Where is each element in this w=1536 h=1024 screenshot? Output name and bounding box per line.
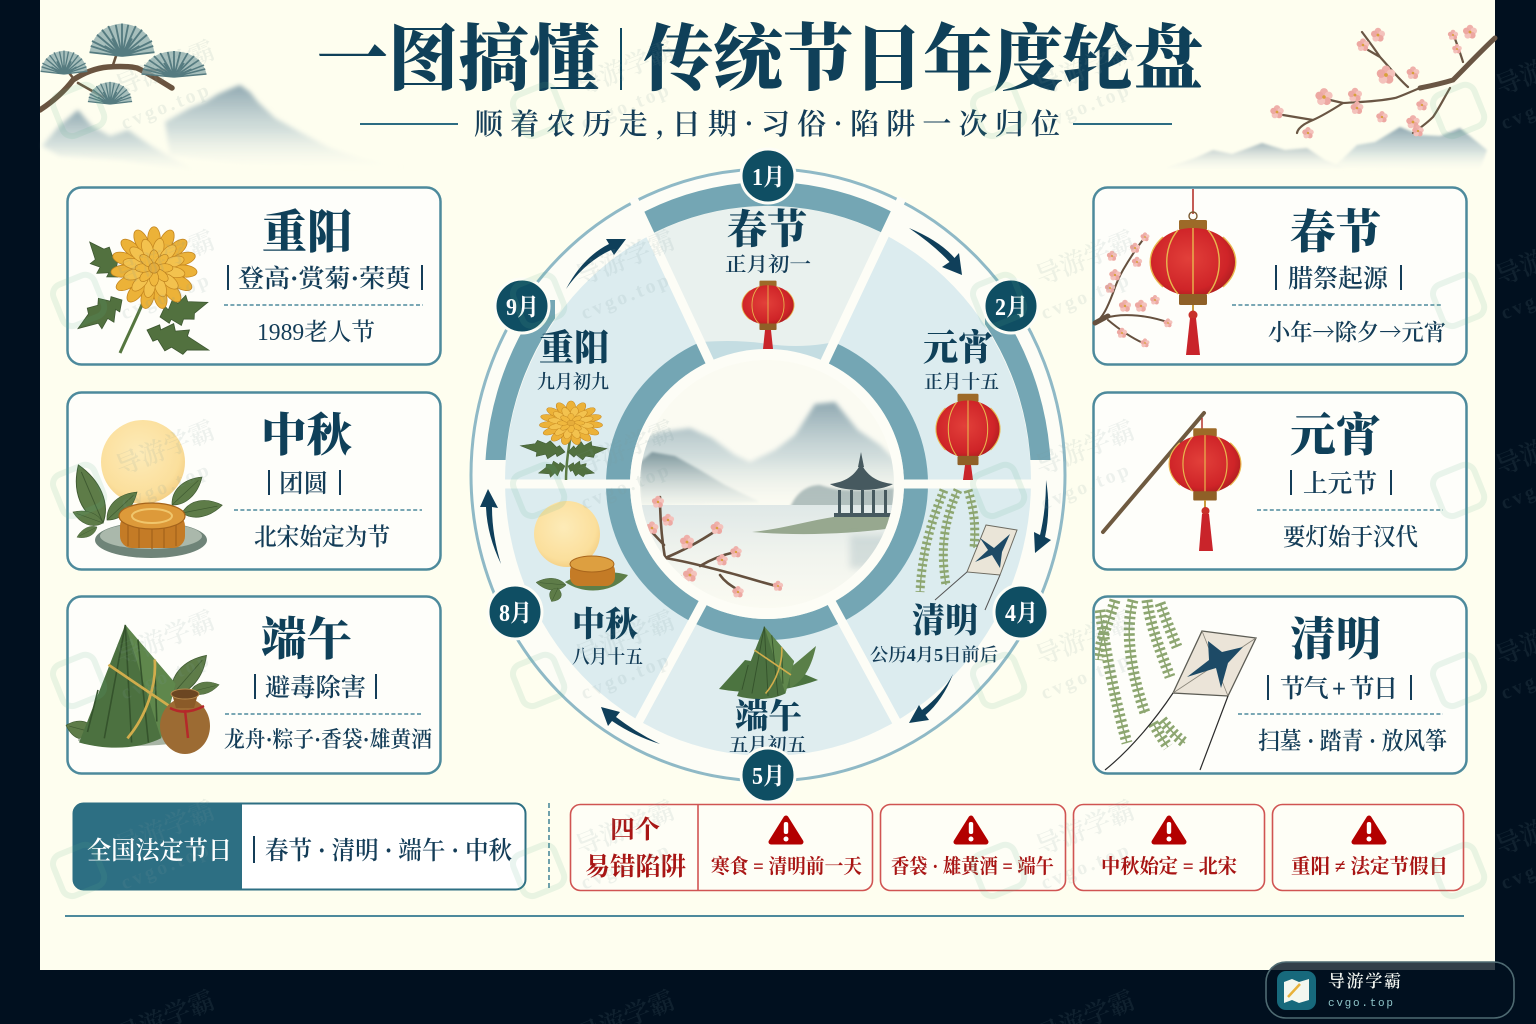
watermark layer: cvgo.top [578,648,675,704]
title: 一图搞懂 [317,20,600,100]
badge: 5月: 5月 [752,763,785,790]
sector 春节 content [725,207,811,349]
panel: 四个易错陷阱: 易错陷阱 [585,853,686,881]
panel: 中秋 card: 中秋 [261,410,352,461]
panel: 重阳 card: 登高·赏菊·荣萸 [238,265,411,293]
badge: 4月: 4月 [1005,600,1038,627]
wheel sector: 重阳 background [505,237,696,480]
trap: 重阳非法定 [1272,804,1464,890]
badge: 4月 [994,585,1048,639]
wheel: outer arc bands [486,183,1050,460]
icon: moon and mooncake [67,420,224,558]
watermark layer: 导游学霸 [572,416,679,481]
badge: 8月: 8月 [499,600,532,627]
trap: 香袋雄黄酒 [880,804,1066,890]
illustration: left ink mountains [42,85,410,172]
wheel: top sector wave [706,341,828,360]
icon: warning [771,818,801,842]
icon: pavilion [830,452,893,517]
sector 重阳 content [519,328,609,481]
watermark layer: 导游学霸 [112,36,219,101]
wheel: sector dividers [480,198,1056,732]
panel: 端午 card: 龙舟·粽子·香袋·雄黄酒 [224,727,432,752]
icon: zongzi and sachet [64,625,220,754]
sector 重阳 content: 九月初九 [537,371,609,393]
icon: warning [956,818,986,842]
panel: 中秋 card: 北宋始定为节 [254,523,390,551]
watermark layer: cvgo.top [118,838,215,894]
icon: lantern on pole [1103,413,1241,551]
watermark layer: cvgo.top [1038,458,1135,514]
panel: 全国法定节日: 春节 · 清明 · 端午 · 中秋 [265,837,512,865]
watermark layer: 导游学霸 [1032,36,1139,101]
panel: 元宵 card: 上元节 [1303,470,1377,498]
sector 清明 content: 清明 [912,602,978,640]
wheel: centre landscape [640,399,894,598]
badge: 1月: 1月 [752,164,785,191]
panel: 全国法定节日 [74,804,526,890]
panel: 端午 card: 端午 [261,614,352,665]
wheel: outer ring [471,169,1065,781]
icon: lantern [742,281,794,349]
wheel: centre disc [630,349,904,619]
watermark layer: 导游学霸 [1032,606,1139,671]
watermark layer: cvgo.top [118,268,215,324]
sector 端午 content: 端午 [735,698,802,736]
icon: chrysanthemum [70,227,213,364]
illustration: right ink mountains [1165,127,1487,170]
watermark layer: 导游学霸 [1032,226,1139,291]
watermark layer: cvgo.top [578,838,675,894]
sector 元宵 content: 元宵 [923,327,993,368]
watermark layer: cvgo.top [118,458,215,514]
panel: 元宵 card: 要灯始于汉代 [1283,524,1418,551]
panel: 春节 card: 小年→除夕→元宵 [1268,314,1446,347]
watermark layer: cvgo.top [1038,268,1135,324]
panel: 端午 card: 避毒除害 [265,674,366,702]
subtitle: 顺着农历走,日期·习俗·陷阱一次归位 [474,102,1060,143]
watermark layer: 导游学霸 [1032,416,1139,481]
badge: 9月: 9月 [506,294,539,321]
arrow: 1月 to 2月 [909,228,962,275]
icon: red lantern [1150,189,1236,355]
wheel: inner arc band [606,328,928,640]
brand badge [1266,962,1514,1018]
watermark layer: cvgo.top [1038,648,1135,704]
badge: 1月 [741,149,795,203]
watermark layer: 导游学霸 [112,226,219,291]
watermark layer: 导游学霸 [112,416,219,481]
panel: 元宵 card: 元宵 [1290,410,1381,461]
watermark layer: cvgo.top [118,648,215,704]
icon: warning [1354,818,1384,842]
panel: 四个易错陷阱: 寒食 = 清明前一天 [711,854,862,878]
panel: 清明 card [1094,596,1466,774]
brand badge: cvgo.top [1328,998,1393,1010]
arrow: 8月 to 9月 [480,489,501,564]
icon: willow [920,490,975,592]
sector 春节 content: 春节 [727,207,807,252]
sector 中秋 content: 八月十五 [572,646,643,668]
sector 中秋 content: 中秋 [572,606,638,644]
icon: chrysanthemum [519,401,608,481]
watermark layer: 导游学霸 [112,796,219,861]
sector 元宵 content [923,327,1000,480]
sector 清明 content [870,490,1017,665]
watermark layer: cvgo.top [578,458,675,514]
brand badge: 导游学霸 [1328,972,1401,991]
sector 端午 content [719,627,818,756]
icon: zongzi [719,627,818,699]
icon: moon [534,501,600,567]
panel: 春节 card: 腊祭起源 [1288,265,1389,293]
panel: 端午 card [64,596,440,774]
watermark layer: 导游学霸 [572,36,679,101]
panel: 四个易错陷阱 [570,804,872,890]
icon: plum sprig [1095,232,1172,347]
icon: swallow kite [935,525,1017,610]
arrow: 9月 to 1月 [566,239,626,289]
wheel sector: 元宵 background [834,236,1031,480]
illustration: pine branch [40,24,206,110]
badge: 9月 [495,279,549,333]
sector 元宵 content: 正月十五 [924,371,999,393]
panel: 重阳 card: 重阳 [262,207,352,258]
watermark layer: cvgo.top [1038,78,1135,134]
panel: 重阳 card: 1989老人节 [257,318,375,346]
badge: 2月: 2月 [995,294,1028,321]
icon: lantern [936,394,1000,480]
title [317,20,1203,100]
panel: 清明 card: 清明 [1290,614,1381,665]
icon: brand map [1277,971,1316,1010]
panel: 重阳 card [68,188,440,364]
arrow: 4月 to 5月 [909,674,953,723]
icon: swallow kite [1105,631,1256,770]
panel: 清明 card: 节气 + 节日 [1280,675,1398,703]
wheel sector: 清明 background [846,488,1031,718]
trap: 中秋始定: 中秋始定 = 北宋 [1101,855,1237,878]
badge: 5月 [741,748,795,802]
icon: plum branch [646,496,783,597]
sector 春节 content: 正月初一 [725,253,811,276]
panel: 春节 card [1094,188,1466,364]
watermark layer: cvgo.top [578,78,675,134]
panel: 春节 card: 春节 [1290,207,1381,258]
panel: 中秋 card [67,392,440,570]
sector 中秋 content [534,501,643,668]
illustration: plum blossom branch [1270,25,1495,138]
panel: 四个易错陷阱: 四个 [610,816,660,844]
sector 重阳 content: 重阳 [539,328,609,368]
panel: 元宵 card [1094,392,1466,570]
panel: 清明 card: 扫墓 · 踏青 · 放风筝 [1258,728,1447,755]
arrow: 2月 to 4月 [1034,480,1051,553]
badge: 8月 [488,585,542,639]
icon: willow branches [1098,600,1185,747]
watermark layer: 导游学霸 [572,226,679,291]
watermark layer: cvgo.top [118,78,215,134]
sector 端午 content: 五月初五 [729,734,806,756]
watermark layer: cvgo.top [1038,838,1135,894]
trap: 中秋始定 [1074,804,1264,890]
trap: 重阳非法定: 重阳 ≠ 法定节假日 [1291,854,1448,878]
icon: mooncake [536,556,628,604]
sector 清明 content: 公历4月5日前后 [870,645,998,665]
wheel sector: 端午 background [643,624,892,755]
watermark layer: 导游学霸 [1032,796,1139,861]
watermark layer: 导游学霸 [572,796,679,861]
panel: 中秋 card: 团圆 [279,470,328,498]
trap: 香袋雄黄酒: 香袋 · 雄黄酒 = 端午 [891,855,1054,878]
badge: 2月 [984,279,1038,333]
panel: 全国法定节日: 全国法定节日 [87,837,232,865]
wheel sector: 中秋 background [505,488,698,718]
wheel sector: 春节 background [654,206,880,346]
watermark layer: 导游学霸 [572,606,679,671]
watermark layer: cvgo.top [578,268,675,324]
watermark layer: 导游学霸 [112,606,219,671]
icon: warning [1154,818,1184,842]
arrow: 5月 to 8月 [601,707,660,744]
title: 传统节日年度轮盘 [643,20,1203,100]
